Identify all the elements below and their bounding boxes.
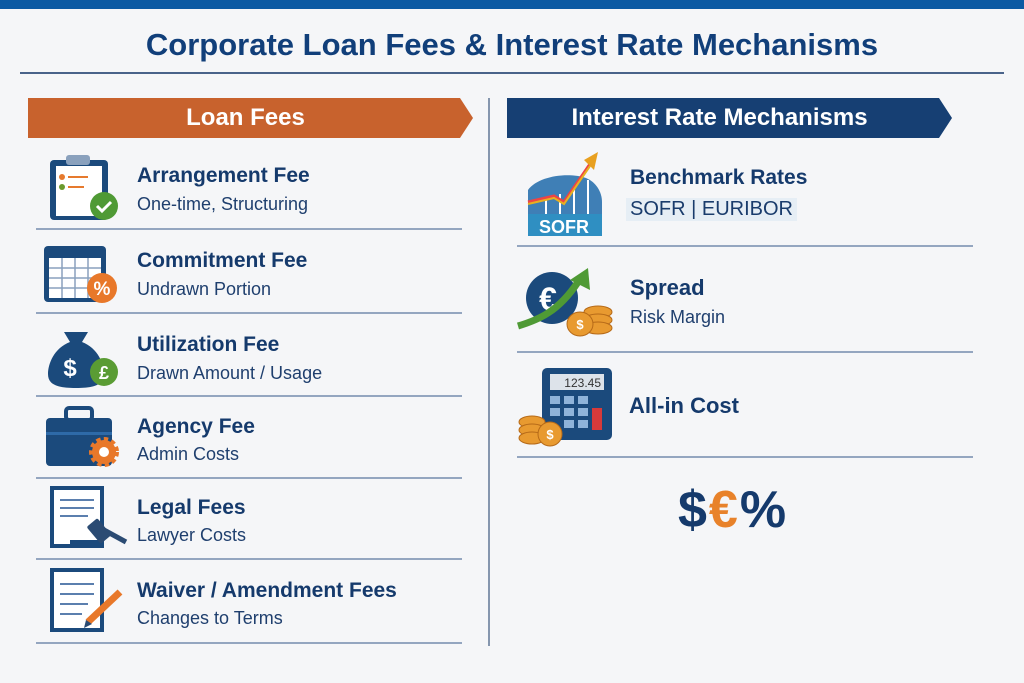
icon: calculator coins: 123.45 (564, 376, 601, 390)
icon: euro spread: € (539, 281, 557, 317)
item: agency fee: Agency Fee (137, 415, 255, 438)
item: spread: Risk Margin (630, 307, 725, 327)
item: commitment fee: Undrawn Portion (137, 279, 271, 299)
item: agency fee: Admin Costs (137, 444, 239, 464)
item: arrangement fee: One-time, Structuring (137, 194, 308, 214)
item: waiver / amendment fees: Changes to Terms (137, 608, 283, 628)
item: all-in cost: All-in Cost (629, 393, 739, 418)
icon: euro spread (517, 268, 612, 336)
title: Corporate Loan Fees & Interest Rate Mechanisms (146, 27, 878, 62)
icon: calculator coins: $ (546, 427, 554, 442)
icon: SOFR chart: SOFR (539, 217, 589, 237)
item: utilization fee: Drawn Amount / Usage (137, 363, 322, 383)
banner: interest rate mechanisms: Interest Rate Mechanisms (571, 104, 868, 131)
icon: calendar (44, 246, 117, 303)
banner: loan fees: Loan Fees (186, 104, 305, 131)
item: spread: Spread (630, 275, 705, 300)
icon: calculator coins (518, 368, 612, 446)
banner: loan fees (28, 98, 473, 138)
item: benchmark rates: Benchmark Rates (630, 166, 807, 189)
item: utilization fee: Utilization Fee (137, 333, 279, 356)
item: legal fees (137, 496, 246, 545)
item: benchmark rates (626, 166, 807, 221)
icon: document gavel (50, 486, 128, 548)
divider (488, 98, 490, 646)
item: utilization fee (137, 333, 322, 383)
item: agency fee (137, 415, 255, 464)
item: spread (630, 275, 725, 327)
item: arrangement fee (137, 164, 310, 214)
icon: money bag: $ (63, 355, 77, 382)
item: waiver / amendment fees (137, 579, 397, 628)
item: benchmark rates: SOFR | EURIBOR (630, 198, 793, 220)
item: commitment fee: Commitment Fee (137, 249, 307, 272)
icon: money bag: £ (99, 363, 109, 383)
icon: clipboard (50, 155, 118, 220)
item: legal fees: Lawyer Costs (137, 525, 246, 545)
icon: calendar: % (94, 279, 111, 300)
item: arrangement fee: Arrangement Fee (137, 164, 310, 187)
item: legal fees: Legal Fees (137, 496, 246, 519)
icon: money bag (48, 332, 118, 388)
icon: document pencil (50, 568, 122, 632)
icon: SOFR chart (528, 152, 602, 237)
currency symbols: $€% (678, 481, 788, 539)
banner: interest rate mechanisms (507, 98, 952, 138)
icon: euro spread: $ (576, 317, 584, 332)
item: commitment fee (137, 249, 307, 299)
top bar (0, 0, 1024, 9)
icon: briefcase (46, 406, 119, 467)
item: waiver / amendment fees: Waiver / Amendment Fees (137, 579, 397, 602)
